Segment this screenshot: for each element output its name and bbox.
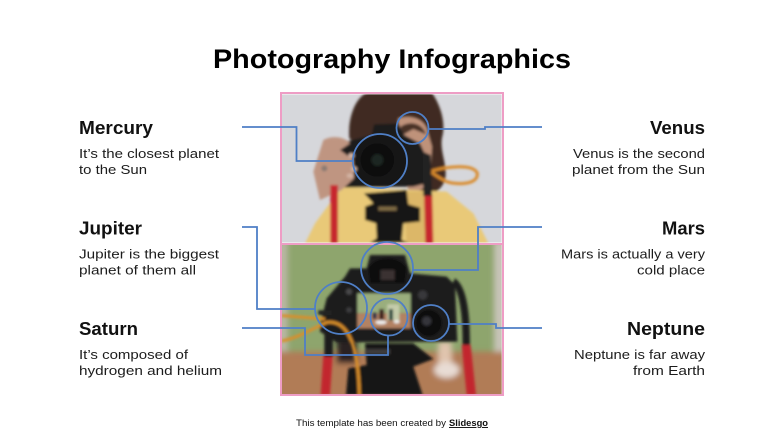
footer credit: This template has been created by (296, 418, 446, 429)
control dial (416, 310, 441, 336)
red straps (321, 355, 333, 395)
circle: eye (396, 112, 428, 144)
tripod (346, 343, 433, 395)
fingertips (348, 153, 354, 158)
camera screen (357, 293, 411, 313)
face (397, 117, 432, 195)
circle: side buttons (315, 282, 367, 334)
left hand (313, 137, 354, 200)
camera back (320, 255, 457, 342)
connector: Jupiter to side buttons (242, 227, 315, 309)
text block: Mars: Mars is actually a very (561, 246, 706, 262)
text block: Jupiter: Jupiter is the biggest (79, 246, 219, 262)
text block: Mars (561, 218, 706, 278)
footer credit: Slidesgo (449, 418, 488, 429)
side buttons (346, 289, 352, 295)
text block: Saturn: hydrogen and helium (79, 363, 222, 378)
text block: Venus: Venus is the second (573, 146, 705, 161)
text block: Mars: Mars (662, 218, 705, 238)
text block: Mercury: to the Sun (79, 162, 147, 177)
text block: Venus (572, 118, 705, 177)
orange cables (282, 316, 325, 319)
camera body (339, 122, 426, 190)
connector: Venus to eye (429, 127, 542, 129)
text block: Saturn: It’s composed of (79, 347, 188, 362)
tripod head (364, 190, 420, 243)
text block: Jupiter: planet of them all (79, 262, 196, 278)
text block: Neptune: Neptune is far away (574, 347, 706, 362)
text block: Neptune: from Earth (633, 363, 705, 378)
text block: Mercury: Mercury (79, 118, 153, 138)
title: Photography Infographics (213, 44, 571, 74)
connector: Mercury to lens (242, 127, 353, 161)
lens (358, 144, 394, 176)
photo: back of camera (278, 242, 506, 398)
text block: Saturn: Saturn (79, 319, 138, 339)
text block: Mercury: It’s the closest planet (79, 146, 219, 161)
circle: viewfinder (361, 242, 413, 294)
orange loop (432, 167, 477, 184)
text block: Jupiter: Jupiter (79, 218, 142, 238)
text block: Mercury (79, 118, 219, 177)
red straps (330, 185, 338, 243)
connector: Mars to viewfinder (413, 227, 542, 270)
text block: Saturn (79, 319, 222, 378)
connector: Neptune to dial (449, 324, 542, 328)
shirt (305, 187, 488, 243)
text block: Neptune: Neptune (627, 319, 705, 339)
hair (349, 92, 446, 194)
callout lines and circles (242, 112, 542, 355)
cable port (318, 310, 332, 315)
circle: dial (413, 305, 449, 341)
circle: screen (370, 298, 408, 336)
text block: Neptune (574, 319, 706, 378)
text block: Jupiter (79, 218, 219, 278)
connector: Saturn to screen (242, 328, 388, 355)
circle: lens (353, 134, 407, 188)
photo frames (281, 93, 503, 395)
text block: Venus: Venus (650, 118, 705, 138)
photo: photographer holding camera (282, 92, 502, 243)
text block: Venus: planet from the Sun (572, 162, 705, 177)
text block: Mars: cold place (637, 262, 705, 278)
ring (321, 165, 327, 171)
